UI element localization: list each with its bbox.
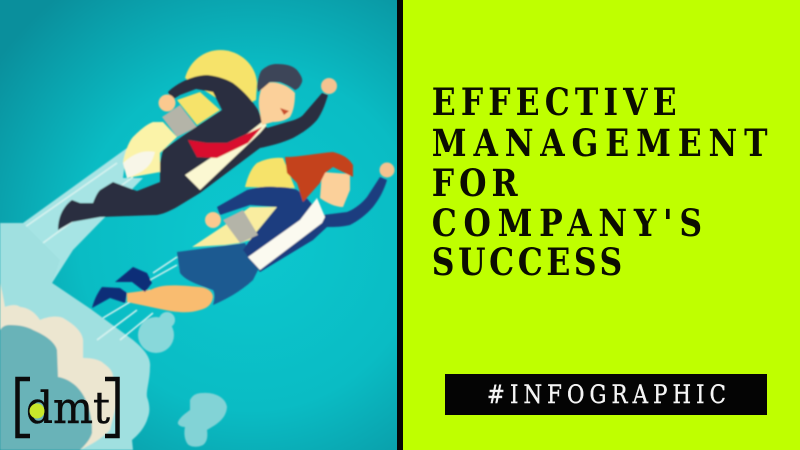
man fist [321,78,337,94]
panel: lime title background [403,0,800,450]
woman jacket [217,177,387,272]
hashtag label [445,374,767,415]
logo dot [30,404,44,418]
woman shoes [92,287,127,308]
man suit [58,75,328,230]
woman [92,152,394,340]
woman jet pack [223,210,258,243]
title: EFFECTIVE [432,82,677,125]
man jet flame [123,122,177,178]
smoke cloud [0,148,227,450]
small cloud puff [178,393,227,447]
woman back hand [205,212,221,228]
panel: illustration background [0,0,398,450]
man head [259,82,295,125]
rocket trail [0,148,143,320]
man shirt [185,122,267,190]
title: MANAGEMENT [432,123,768,166]
hashtag label: #INFOGRAPHIC [487,380,726,409]
illustration: flying business people [0,50,394,450]
woman shirt [248,198,325,270]
man jet pack [162,105,197,137]
woman legs [127,285,213,312]
title: COMPANY'S [432,203,702,246]
man [58,50,337,230]
woman rocket bulb [245,158,295,188]
woman fist [380,162,394,178]
title [432,82,768,285]
title: SUCCESS [432,242,622,285]
man back hand [158,94,176,112]
woman hair [285,152,353,202]
man hair [257,64,302,92]
logo brackets [18,379,118,436]
title: FOR [432,163,518,206]
panel: divider bar [397,0,403,450]
logo text: dmt [26,383,110,434]
man rocket bulb [185,50,257,110]
woman streaks [97,257,177,340]
man tie [188,127,262,158]
logo: dmt [18,379,118,436]
woman head [320,172,350,207]
woman skirt [177,243,258,305]
